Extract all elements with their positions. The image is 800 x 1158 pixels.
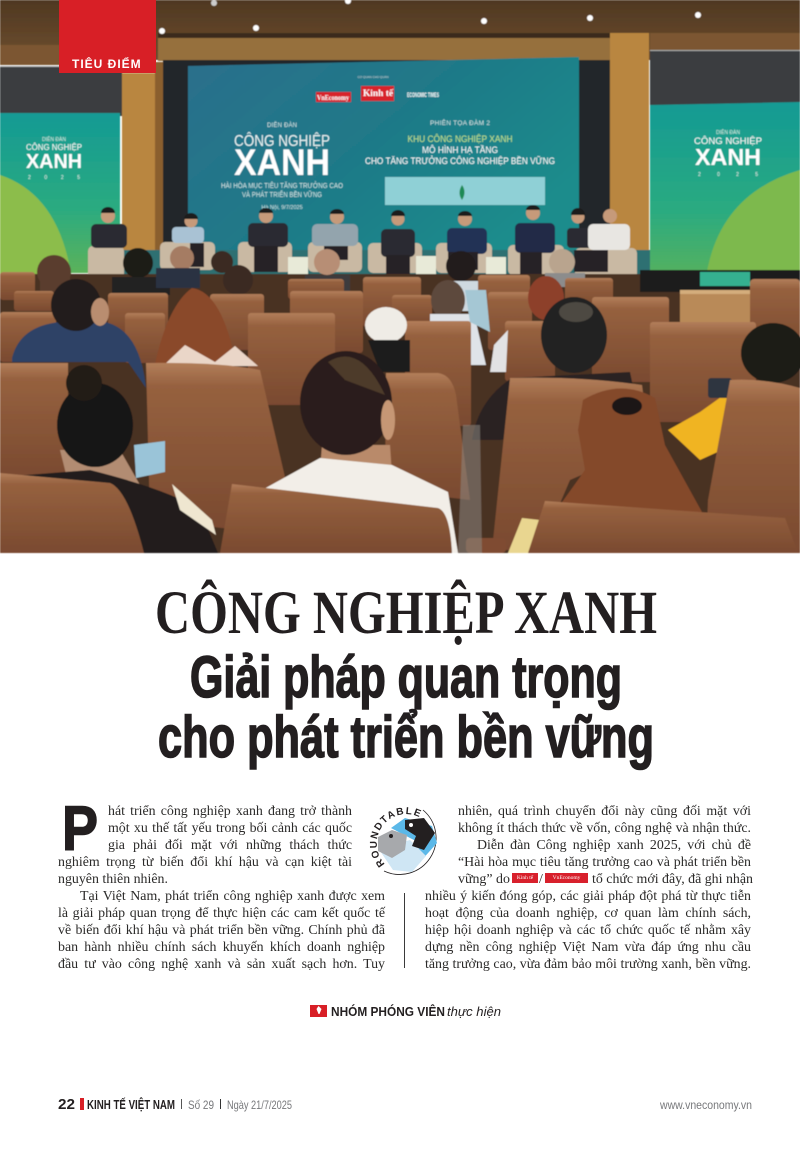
roundtable badge [370,807,437,875]
main LED screen: HÀI HÒA MỤC TIÊU TĂNG TRƯỞNG CAO [221,181,343,190]
side screen left [0,113,120,280]
headline line 2: Giải pháp quan trọng [190,645,622,710]
column 2: nhiều ý kiến đóng góp, các giải pháp đột phá từ thực tiễn [425,889,751,904]
photo: conference panel and audience [0,0,800,554]
main LED screen [188,57,579,250]
issue info [181,1098,292,1112]
column 1: là giải pháp quan trọng để thực hiện các cam kết quốc tế [58,906,385,921]
stage dark frame [163,60,610,270]
main LED screen: CƠ QUAN CHỦ QUẢN [357,74,389,79]
column 2 [425,804,753,972]
main LED screen: VÀ PHÁT TRIỂN BỀN VỮNG [242,189,322,199]
column 2: vững” do [458,872,510,887]
audience people, middle rows [12,276,800,460]
footer [58,1096,752,1113]
column 1: nguyên thiên nhiên. [58,872,168,887]
stage floor [120,250,650,290]
column 1: về biến đổi khí hậu và phát triển bền vững. Chính phủ đã [58,923,385,938]
curly-haired woman [508,388,702,553]
column 2: tổ chức mới đây, đã ghi nhận [592,872,753,887]
side screen left: 2 0 2 5 [28,175,80,181]
main LED screen: CÔNG NGHIỆP [234,131,330,150]
column 2: tăng trưởng cao, vừa đảm bảo môi trường xanh, bền vững. [425,957,751,972]
main LED screen: MÔ HÌNH HẠ TẦNG [422,145,498,155]
column 2: hiệp hội doanh nghiệp và các tổ chức quốc tế nhằm xây [425,923,751,938]
column 1: gia phải đối mặt với những thách thức [108,838,352,853]
publication name: KINH TẾ VIỆT NAM [87,1097,175,1112]
main LED screen: VnEconomy [317,94,349,102]
section tag: TIÊU ĐIỂM [59,0,156,73]
curtains [0,50,800,116]
column 2: VnEconomy [553,875,580,881]
main LED screen: Hà Nội, 9/7/2025 [261,205,303,211]
issue info: Ngày 21/7/2025 [227,1098,292,1112]
column 1: đầu tư vào công nghệ xanh và sản xuất sạch hơn. Tuy [58,957,385,972]
column 2: / [539,872,543,887]
side screen right [650,102,800,285]
column 1: một xu thế tất yếu trong bối cảnh các quốc [108,821,352,836]
issue info: Số 29 [188,1098,214,1112]
main LED screen: ECONOMIC TIMES [407,93,439,99]
byline icon [310,1005,327,1017]
main LED screen: CHO TĂNG TRƯỞNG CÔNG NGHIỆP BỀN VỮNG [365,155,555,166]
column 2: không ít thách thức về vốn, công nghệ và nhận thức. [458,821,751,836]
side screen left: CÔNG NGHIỆP [26,142,82,152]
byline text: NHÓM PHÓNG VIÊN [331,1004,445,1019]
main LED screen: Kinh tế [363,88,394,98]
audience seats, front row [0,473,798,553]
main LED screen: KHU CÔNG NGHIỆP XANH [408,134,512,144]
central man from behind [262,351,458,553]
main LED screen: DIỄN ĐÀN [267,122,297,129]
badge hexagon icon [378,818,437,872]
tag label: TIÊU ĐIỂM [72,57,142,71]
ceiling [0,0,800,65]
audience seats, second row [0,363,800,553]
woman with hair bun [14,365,218,553]
column 1: nghiêm trọng từ biến đổi khí hậu và cạn kiệt tài [58,855,352,870]
headline [155,579,657,770]
side screen left: DIỄN ĐÀN [42,136,66,143]
column 1: Tại Việt Nam, phát triển công nghiệp xanh được xem [80,889,385,904]
byline italic: thực hiện [447,1004,501,1019]
main LED screen: XANH [234,142,330,183]
back audience and front-of-stage signs [0,246,800,553]
headline line 1: CÔNG NGHIỆP XANH [155,579,657,647]
audience seats, rear rows [0,272,800,422]
column 2: “Hài hòa mục tiêu tăng trưởng cao và phát triển bền [458,855,751,870]
badge arc [384,810,436,874]
column 1: ban hành nhiều chính sách khuyến khích doanh nghiệp [58,940,385,955]
side screen right: DIỄN ĐÀN [716,129,740,136]
column 1: hát triển công nghiệp xanh đang trở thành [108,804,352,819]
badge text: ROUNDTABLE [370,807,422,868]
website: www.vneconomy.vn [659,1098,752,1112]
column 2: hoạt động của doanh nghiệp, cơ quan làm chính sách, [425,906,751,921]
page number: 22 [58,1096,75,1113]
main LED screen: PHIÊN TỌA ĐÀM 2 [430,118,490,127]
side screen left: XANH [26,151,82,173]
column 1 [58,804,386,972]
red bar [80,1098,84,1110]
column 2: nhiên, quá trình chuyển đổi này cũng đối mặt với [458,804,751,819]
wood pillars [122,33,649,273]
column divider [404,893,405,968]
side screen right: XANH [695,144,761,170]
byline [310,1004,501,1019]
panelists [88,205,637,286]
column 2: Kinh tế [517,875,533,881]
side screen right: CÔNG NGHIỆP [694,136,762,146]
column 2: dựng nền công nghiệp Việt Nam vừa đáp ứng nhu cầu [425,940,751,955]
column 2: Diễn đàn Công nghiệp xanh 2025, với chủ đề [477,838,751,853]
side screen right: 2 0 2 5 [698,172,758,178]
